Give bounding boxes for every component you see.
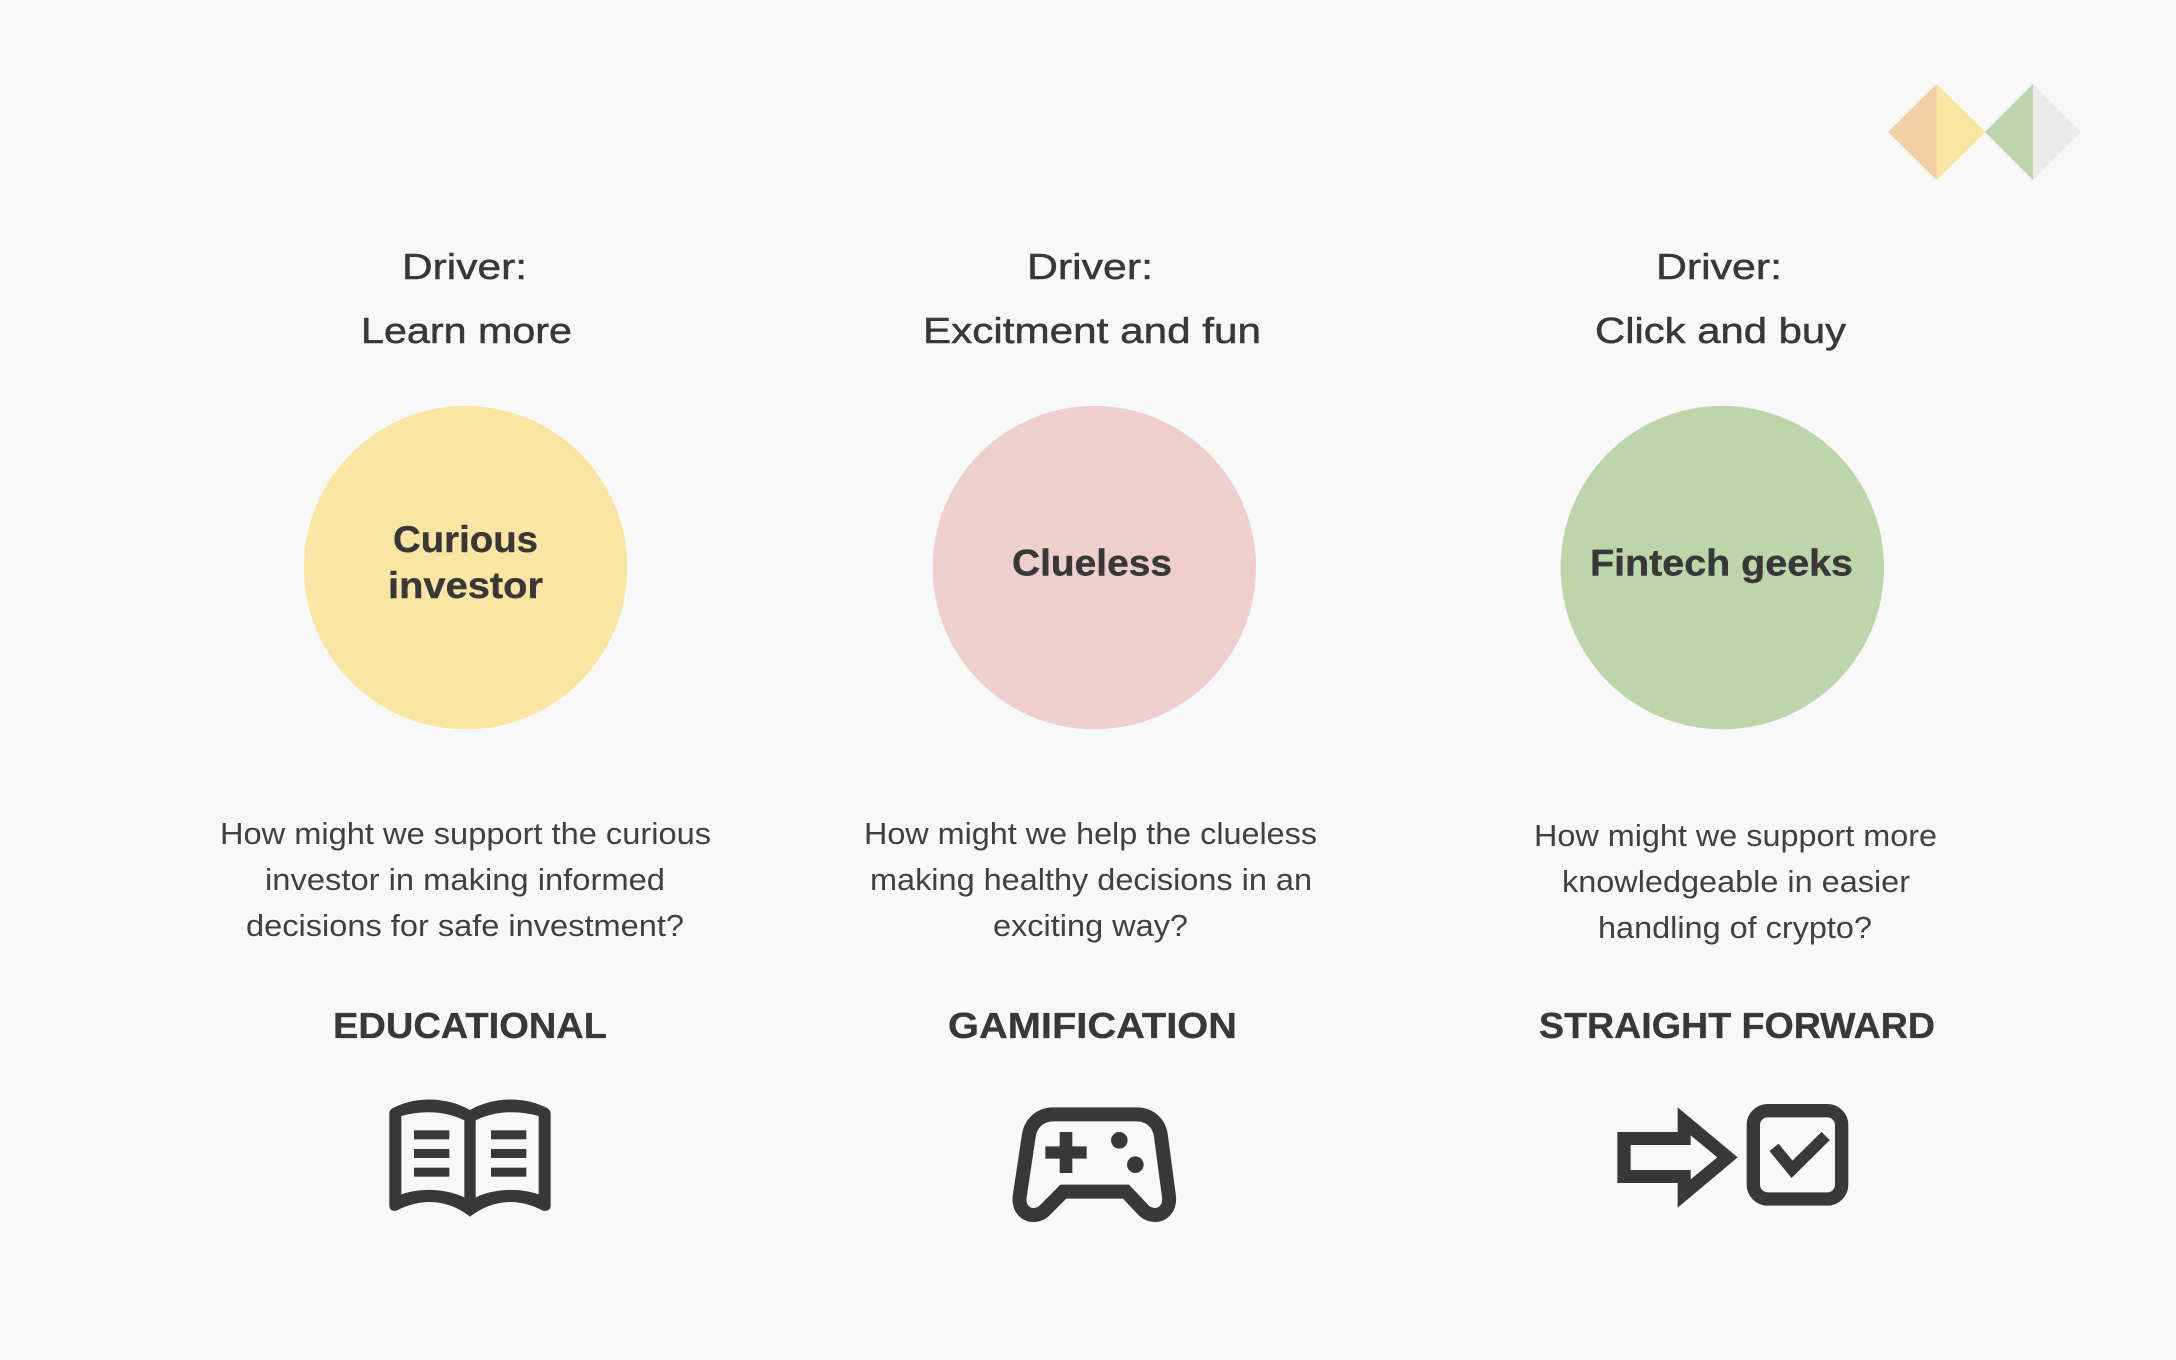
text: fintech geeks question: handling of crypto? [1598, 911, 1872, 945]
logo: diamonds [1888, 84, 2081, 180]
label: educational: EDUCATIONAL [333, 1005, 607, 1046]
heading: driver excitment and fun [923, 246, 1261, 351]
text: curious investor question: How might we support the curious [220, 817, 711, 851]
text: clueless question: How might we help the clueless [864, 817, 1317, 851]
heading: driver excitment and fun: Excitment and fun [923, 310, 1261, 351]
heading: driver click and buy [1595, 246, 1846, 351]
text: fintech geeks question: How might we support more [1534, 819, 1937, 853]
circle: curious investor: Curious [393, 519, 538, 560]
icon: arrow [1617, 1107, 1738, 1208]
text: clueless question: exciting way? [993, 909, 1188, 943]
circle: clueless: Clueless [1012, 542, 1172, 584]
circle: curious investor: investor [388, 565, 543, 606]
text: curious investor question [220, 817, 711, 943]
column: clueless [864, 246, 1317, 1215]
heading: driver click and buy: Driver: [1656, 246, 1782, 287]
column: curious investor [220, 246, 711, 1217]
heading: driver learn more: Driver: [402, 246, 527, 287]
label: straight forward: STRAIGHT FORWARD [1539, 1005, 1935, 1046]
heading: driver learn more: Learn more [361, 310, 572, 351]
circle: curious investor [304, 406, 627, 729]
text: clueless question [864, 817, 1317, 943]
icon: open book [389, 1099, 551, 1217]
icon: checkbox [1753, 1111, 1842, 1199]
text: curious investor question: investor in making informed [265, 863, 665, 897]
text: fintech geeks question: knowledgeable in easier [1562, 865, 1910, 899]
text: curious investor question: decisions for safe investment? [246, 909, 684, 943]
column: fintech geeks [1534, 246, 1937, 1208]
label: gamification: GAMIFICATION [948, 1005, 1237, 1046]
heading: driver learn more [361, 246, 572, 351]
icon: game controller [1020, 1114, 1169, 1215]
heading: driver click and buy: Click and buy [1595, 310, 1846, 351]
heading: driver excitment and fun: Driver: [1027, 246, 1153, 287]
circle: fintech geeks: Fintech geeks [1590, 542, 1853, 584]
circle: clueless [933, 406, 1256, 729]
icon: arrow and checkbox [1617, 1107, 1842, 1208]
text: fintech geeks question [1534, 819, 1937, 945]
circle: fintech geeks [1561, 406, 1884, 729]
text: clueless question: making healthy decisions in an [870, 863, 1312, 897]
